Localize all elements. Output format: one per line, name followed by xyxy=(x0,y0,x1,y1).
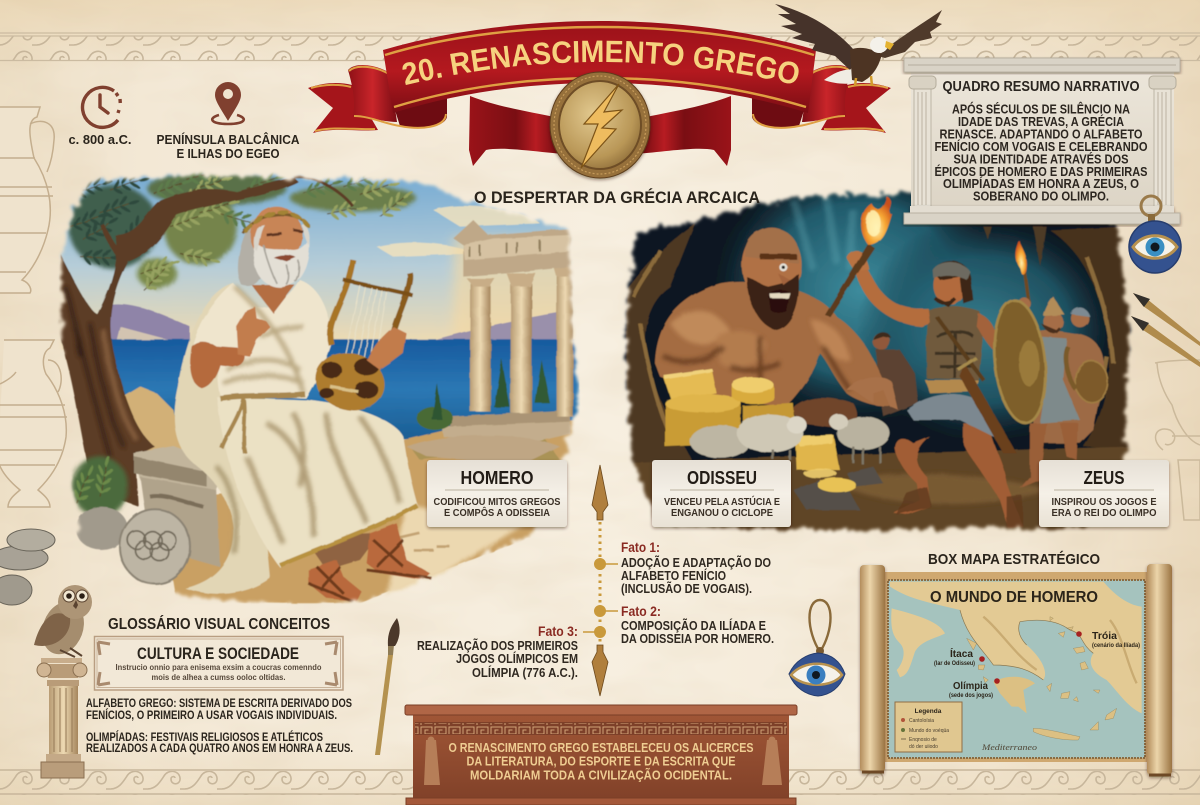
decorative vase top left xyxy=(0,107,54,293)
map legend: dó der uiiodo xyxy=(909,744,938,750)
illustration: Odysseus and the Cyclops cave xyxy=(621,188,1134,535)
glossary definitions xyxy=(86,698,353,755)
summary text: ÉPICOS DE HOMERO E DAS PRIMEIRAS xyxy=(934,164,1148,179)
spear tip top xyxy=(592,465,608,520)
panel: culture and society: Instrucio onnio para enisema exsim a coucras comenndo xyxy=(116,662,322,672)
summary text: FENÍCIO COM VOGAIS E CELEBRANDO xyxy=(934,139,1148,154)
timeline fact 3: JOGOS OLÍMPICOS EM xyxy=(456,651,578,666)
cyclops xyxy=(655,228,898,427)
header icon and text: date xyxy=(68,87,132,147)
timeline nodes xyxy=(583,558,618,638)
label card: Homero: E COMPÔS A ODISSEIA xyxy=(444,506,550,519)
icon: evil eye amulet top xyxy=(1129,196,1181,273)
map markers and labels: Tróia xyxy=(1092,630,1117,642)
map markers and labels xyxy=(934,630,1140,752)
timeline fact 1: ALFABETO FENÍCIO xyxy=(621,568,726,583)
decorative vase and capital right xyxy=(1155,360,1200,520)
torch and flame xyxy=(825,197,892,317)
map markers and labels: (lar de Odisseu) xyxy=(934,661,975,667)
location label: E ILHAS DO EGEO xyxy=(176,147,280,161)
base xyxy=(904,206,1180,224)
timeline spear xyxy=(583,465,618,696)
label card: Zeus: ZEUS xyxy=(1084,468,1124,488)
conclusion text xyxy=(448,740,754,782)
summary text: SUA IDENTIDADE ATRAVÉS DOS xyxy=(954,152,1129,166)
panel: culture and society: mois de alhea a cumss ooloc oltidas. xyxy=(152,672,286,682)
header icon and text: location xyxy=(156,83,300,161)
glossary definitions: OLIMPÍADAS: FESTIVAIS RELIGIOSOS E ATLÉTICOS xyxy=(86,731,323,744)
summary text: OLIMPÍADAS EM HONRA A ZEUS, O xyxy=(943,176,1139,191)
glossary definitions: REALIZADOS A CADA QUATRO ANOS EM HONRA A ZEUS. xyxy=(86,743,353,755)
left ribbon tail xyxy=(308,65,447,133)
background companions xyxy=(873,240,1108,488)
map markers and labels: (cenário da Ilíada) xyxy=(1092,643,1140,649)
main ribbon xyxy=(383,21,816,113)
summary text: IDADE DAS TREVAS, A GRÉCIA xyxy=(958,114,1125,129)
location label xyxy=(156,132,300,161)
icon: paintbrush xyxy=(375,618,400,755)
summary text: APÓS SÉCULOS DE SILÊNCIO NA xyxy=(952,102,1131,116)
scroll rollers xyxy=(860,564,1172,775)
timeline fact 3: OLÍMPIA (776 A.C.). xyxy=(472,665,578,680)
timeline fact 2: DA ODISSEIA POR HOMERO. xyxy=(621,632,774,646)
icon: clock xyxy=(82,87,120,127)
map legend xyxy=(895,702,962,752)
decorative vase middle left xyxy=(0,340,67,507)
relief figures xyxy=(424,736,782,785)
timeline fact 2: COMPOSIÇÃO DA ILÍADA E xyxy=(621,618,766,633)
icon: evil eye amulet middle xyxy=(789,600,845,696)
olive tree xyxy=(57,162,419,517)
summary text: RENASCE. ADAPTANDO O ALFABETO xyxy=(940,126,1142,142)
sheep xyxy=(690,414,890,465)
map markers and labels: Olímpia xyxy=(953,680,988,692)
map land xyxy=(890,582,1142,740)
title: 20. RENASCIMENTO GREGO xyxy=(402,40,799,85)
summary text xyxy=(934,102,1148,204)
ionic column xyxy=(37,658,87,778)
Homer figure xyxy=(174,207,432,602)
Homer head xyxy=(238,207,312,287)
label card: Odisseu xyxy=(652,460,791,527)
label card: Homero: CODIFICOU MITOS GREGOS xyxy=(434,496,560,508)
lyre xyxy=(309,260,413,418)
summary text: SOBERANO DO OLIMPO. xyxy=(973,188,1109,204)
top greek wave border xyxy=(0,33,1200,60)
timeline fact 1 xyxy=(621,540,771,596)
title banner with shield xyxy=(308,21,891,182)
location label: PENÍNSULA BALCÂNICA xyxy=(156,132,300,147)
map legend: Legenda xyxy=(915,708,942,715)
timeline fact 3: REALIZAÇÃO DOS PRIMEIROS xyxy=(417,638,578,653)
right ribbon tail xyxy=(752,65,891,133)
timeline fact 1: Fato 1: xyxy=(621,540,660,555)
icon: bronze shield with lightning xyxy=(550,72,650,178)
label card: Homero xyxy=(427,460,567,527)
timeline fact 2: Fato 2: xyxy=(621,604,661,619)
entablature xyxy=(904,58,1180,72)
spear tip bottom xyxy=(592,645,608,696)
map markers and labels: (sede dos jogos) xyxy=(949,693,993,699)
panel heading: QUADRO RESUMO NARRATIVO xyxy=(942,78,1140,95)
stone disc with olympic rings xyxy=(120,509,190,584)
paintbrushes top right xyxy=(1131,293,1200,367)
timeline fact 1: (INCLUSÃO DE VOGAIS). xyxy=(621,581,752,596)
label card: Zeus: ERA O REI DO OLIMPO xyxy=(1052,507,1156,519)
panel: culture and society: CULTURA E SOCIEDADE xyxy=(137,645,299,663)
timeline fact 3: Fato 3: xyxy=(538,624,578,639)
timeline fact 3 xyxy=(417,624,578,680)
timeline fact 2 xyxy=(621,604,774,646)
illustration: Homer with lyre by the sea xyxy=(53,162,587,603)
Odysseus xyxy=(847,251,1051,528)
hanging drape xyxy=(469,96,731,166)
stone bench xyxy=(76,446,220,584)
icon: owl on column xyxy=(34,585,92,778)
panel: narrative summary in marble temple frame xyxy=(904,58,1180,224)
coins bottom left xyxy=(0,529,55,605)
timeline fact 1: ADOÇÃO E ADAPTAÇÃO DO xyxy=(621,555,771,570)
icon: eagle xyxy=(775,4,942,86)
conclusion text: DA LITERATURA, DO ESPORTE E DA ESCRITA QUE xyxy=(466,754,736,768)
panel: scroll map xyxy=(860,564,1172,775)
parchment scroll xyxy=(884,572,1149,762)
panel: culture and society xyxy=(94,636,343,690)
map legend: Cantoloísia xyxy=(909,718,934,724)
owl xyxy=(34,585,92,660)
label card: Odisseu: ODISSEU xyxy=(687,468,757,488)
temple ruin xyxy=(407,220,575,463)
panel: conclusion pedestal xyxy=(405,705,797,805)
map title: O MUNDO DE HOMERO xyxy=(930,589,1098,606)
glossary definitions: ALFABETO GREGO: SISTEMA DE ESCRITA DERIVADO DOS xyxy=(86,698,352,710)
glossary definitions: FENÍCIOS, O PRIMEIRO A USAR VOGAIS INDIVIDUAIS. xyxy=(86,709,337,722)
cheese wheels and blocks xyxy=(662,368,841,482)
glossary heading: GLOSSÁRIO VISUAL CONCEITOS xyxy=(108,616,330,633)
icon: map pin xyxy=(212,83,244,124)
map legend: Enqnosio de xyxy=(909,737,937,743)
map markers and labels: Ítaca xyxy=(950,647,973,660)
section heading: O DESPERTAR DA GRÉCIA ARCAICA xyxy=(474,188,760,207)
conclusion text: MOLDARIAM TODA A CIVILIZAÇÃO OCIDENTAL. xyxy=(470,768,732,782)
conclusion text: O RENASCIMENTO GREGO ESTABELECEU OS ALICERCES xyxy=(448,740,754,755)
bottom greek wave border xyxy=(0,770,1200,795)
label card: Odisseu: VENCEU PELA ASTÚCIA E xyxy=(664,495,780,508)
map heading: BOX MAPA ESTRATÉGICO xyxy=(928,551,1100,568)
label card: Zeus xyxy=(1039,460,1169,527)
date label: c. 800 a.C. xyxy=(68,133,132,147)
marble columns xyxy=(909,76,1176,208)
map markers and labels: Mediterraneo xyxy=(981,742,1037,752)
label card: Zeus: INSPIROU OS JOGOS E xyxy=(1052,496,1156,508)
label card: Odisseu: ENGANOU O CICLOPE xyxy=(671,507,773,519)
label card: Homero: HOMERO xyxy=(460,468,534,488)
map legend: Mundo do voéqüa xyxy=(909,728,949,734)
